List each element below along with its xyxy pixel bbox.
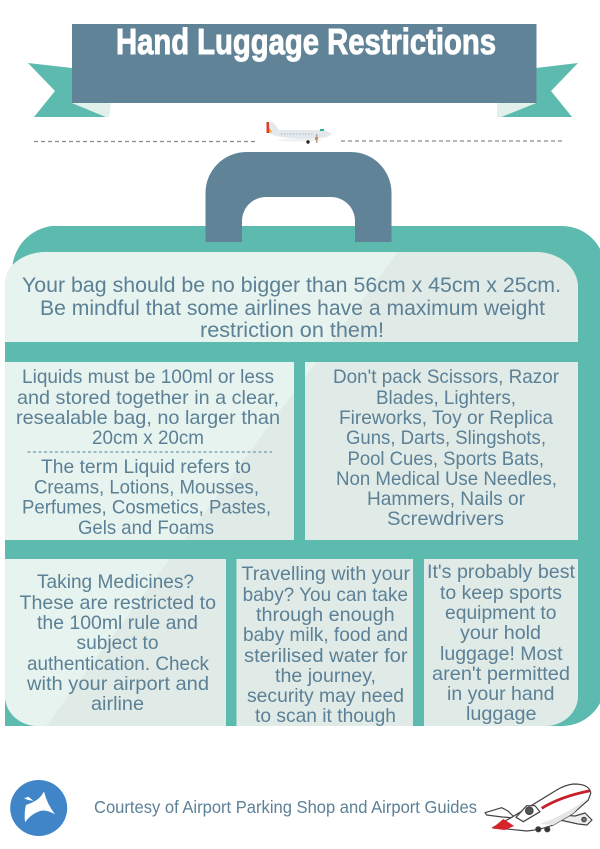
panel: sports equipment: to keep sports bbox=[440, 582, 562, 604]
panel: prohibited items bbox=[333, 366, 559, 530]
panel: prohibited items: Fireworks, Toy or Replica bbox=[339, 407, 553, 429]
panel: travelling with a baby: the journey, bbox=[275, 665, 376, 687]
panel: medicines: airline bbox=[91, 693, 144, 715]
ribbon right tail bbox=[501, 63, 578, 117]
panel: liquids: resealable bag, no larger than bbox=[16, 407, 280, 429]
panel: sports equipment: luggage bbox=[466, 703, 536, 725]
panel: bag size bbox=[22, 273, 561, 342]
panel: prohibited items: Guns, Darts, Slingshots, bbox=[346, 427, 546, 449]
panel: travelling with a baby bbox=[242, 563, 410, 727]
panel: sports equipment: in your hand bbox=[447, 683, 554, 705]
panel: liquids: Creams, Lotions, Mousses, bbox=[34, 476, 259, 498]
panel: prohibited items: Pool Cues, Sports Bats, bbox=[348, 448, 544, 470]
icon: small propeller plane bbox=[266, 122, 332, 144]
panel: liquids: 20cm x 20cm bbox=[92, 427, 204, 449]
panel: prohibited items: Screwdrivers bbox=[387, 508, 504, 530]
icon: jet airplane bbox=[485, 784, 592, 832]
panel: medicines: with your airport and bbox=[26, 673, 209, 695]
panel: travelling with a baby: baby milk, food and bbox=[243, 624, 408, 646]
panel: bag size: restriction on them! bbox=[200, 318, 384, 342]
panel: travelling with a baby: to scan it though bbox=[255, 705, 396, 727]
panel: prohibited items: Hammers, Nails or bbox=[367, 488, 525, 510]
panel: medicines bbox=[20, 571, 216, 715]
ribbon left tail bbox=[28, 63, 106, 117]
panel: sports equipment: your hold bbox=[460, 622, 541, 644]
icon: airport parking shop logo bbox=[10, 780, 67, 836]
footer credit: Courtesy of Airport Parking Shop and Airport Guides bbox=[94, 797, 477, 817]
panel: travelling with a baby: baby? You can take bbox=[243, 584, 408, 606]
ribbon right fold bbox=[497, 103, 536, 117]
banner ribbon bbox=[28, 24, 578, 117]
panel: medicines: Taking Medicines? bbox=[37, 571, 194, 593]
panel: liquids: The term Liquid refers to bbox=[41, 456, 251, 478]
banner body bbox=[72, 24, 536, 103]
title: Hand Luggage Restrictions bbox=[116, 21, 496, 62]
panel: sports equipment: luggage! Most bbox=[440, 643, 563, 665]
panel: travelling with a baby: through enough bbox=[256, 604, 395, 626]
panel: bag size: Be mindful that some airlines have a maximum weight bbox=[40, 296, 545, 320]
panel: prohibited items: Non Medical Use Needles, bbox=[336, 468, 557, 490]
panel: travelling with a baby: Travelling with your bbox=[242, 563, 410, 585]
panel: sports equipment: aren't permitted bbox=[432, 663, 570, 685]
panel: sports equipment: It's probably best bbox=[427, 561, 576, 583]
panel: liquids: Liquids must be 100ml or less bbox=[22, 366, 274, 388]
suitcase body bbox=[5, 226, 600, 726]
panel: medicines: the 100ml rule and bbox=[37, 612, 198, 634]
panel: sports equipment: equipment to bbox=[445, 602, 557, 624]
panel: liquids bbox=[16, 366, 280, 539]
ribbon left fold bbox=[72, 103, 111, 117]
panel: prohibited items: Don't pack Scissors, Razor bbox=[333, 366, 559, 388]
panel: prohibited items: Blades, Lighters, bbox=[376, 387, 516, 409]
panel backgrounds bbox=[0, 245, 600, 735]
panel: medicines: authentication. Check bbox=[27, 653, 209, 675]
panel: liquids: Gels and Foams bbox=[78, 517, 214, 539]
panel: travelling with a baby: sterilised water for bbox=[244, 645, 408, 667]
panel: bag size: Your bag should be no bigger than 56cm x 45cm x 25cm. bbox=[22, 273, 561, 297]
panel: sports equipment bbox=[427, 561, 576, 725]
panel: liquids: and stored together in a clear, bbox=[17, 387, 279, 409]
panel: liquids: Perfumes, Cosmetics, Pastes, bbox=[22, 497, 271, 519]
panel: medicines: These are restricted to bbox=[20, 592, 216, 614]
panel: medicines: subject to bbox=[76, 632, 159, 654]
panel: travelling with a baby: security may need bbox=[247, 685, 404, 707]
suitcase handle bbox=[206, 152, 392, 242]
